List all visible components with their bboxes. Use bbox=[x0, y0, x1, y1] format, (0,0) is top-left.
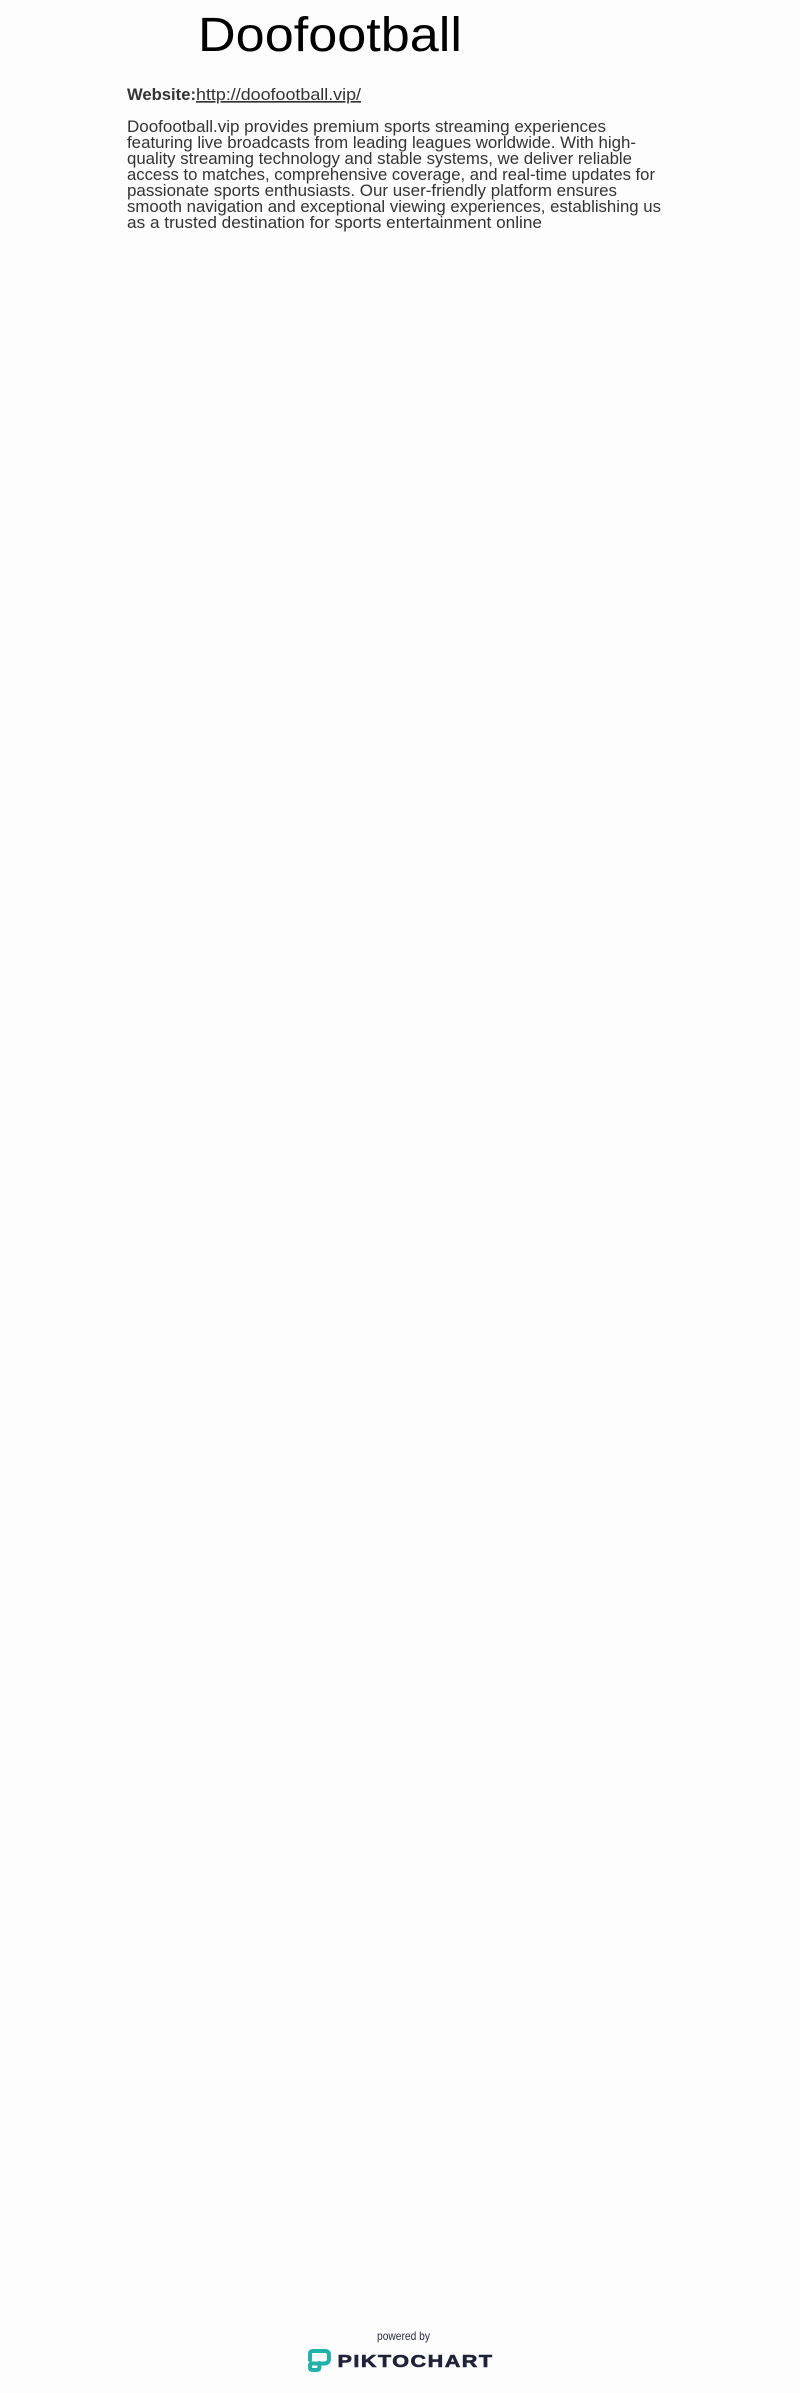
description text block: featuring live broadcasts from leading leagues worldwide. With high- bbox=[127, 133, 636, 152]
description text block: passionate sports enthusiasts. Our user-friendly platform ensures bbox=[127, 181, 617, 200]
description text block: as a trusted destination for sports entertainment online bbox=[127, 213, 542, 232]
Piktochart wordmark: PIKTOCHART bbox=[338, 2352, 494, 2372]
icon: Piktochart logo mark bbox=[310, 2351, 329, 2370]
title: Doofootball bbox=[198, 9, 462, 62]
description text block bbox=[127, 117, 661, 232]
website link line: http://doofootball.vip/ bbox=[196, 86, 361, 104]
description text block: quality streaming technology and stable systems, we deliver reliable bbox=[127, 149, 632, 168]
website link line bbox=[127, 86, 361, 104]
description text block: Doofootball.vip provides premium sports streaming experiences bbox=[127, 117, 606, 136]
description text block: access to matches, comprehensive coverage, and real-time updates for bbox=[127, 165, 655, 184]
description text block: smooth navigation and exceptional viewing experiences, establishing us bbox=[127, 197, 661, 216]
powered by label: powered by bbox=[377, 2329, 430, 2343]
website link line: Website: bbox=[127, 86, 196, 104]
